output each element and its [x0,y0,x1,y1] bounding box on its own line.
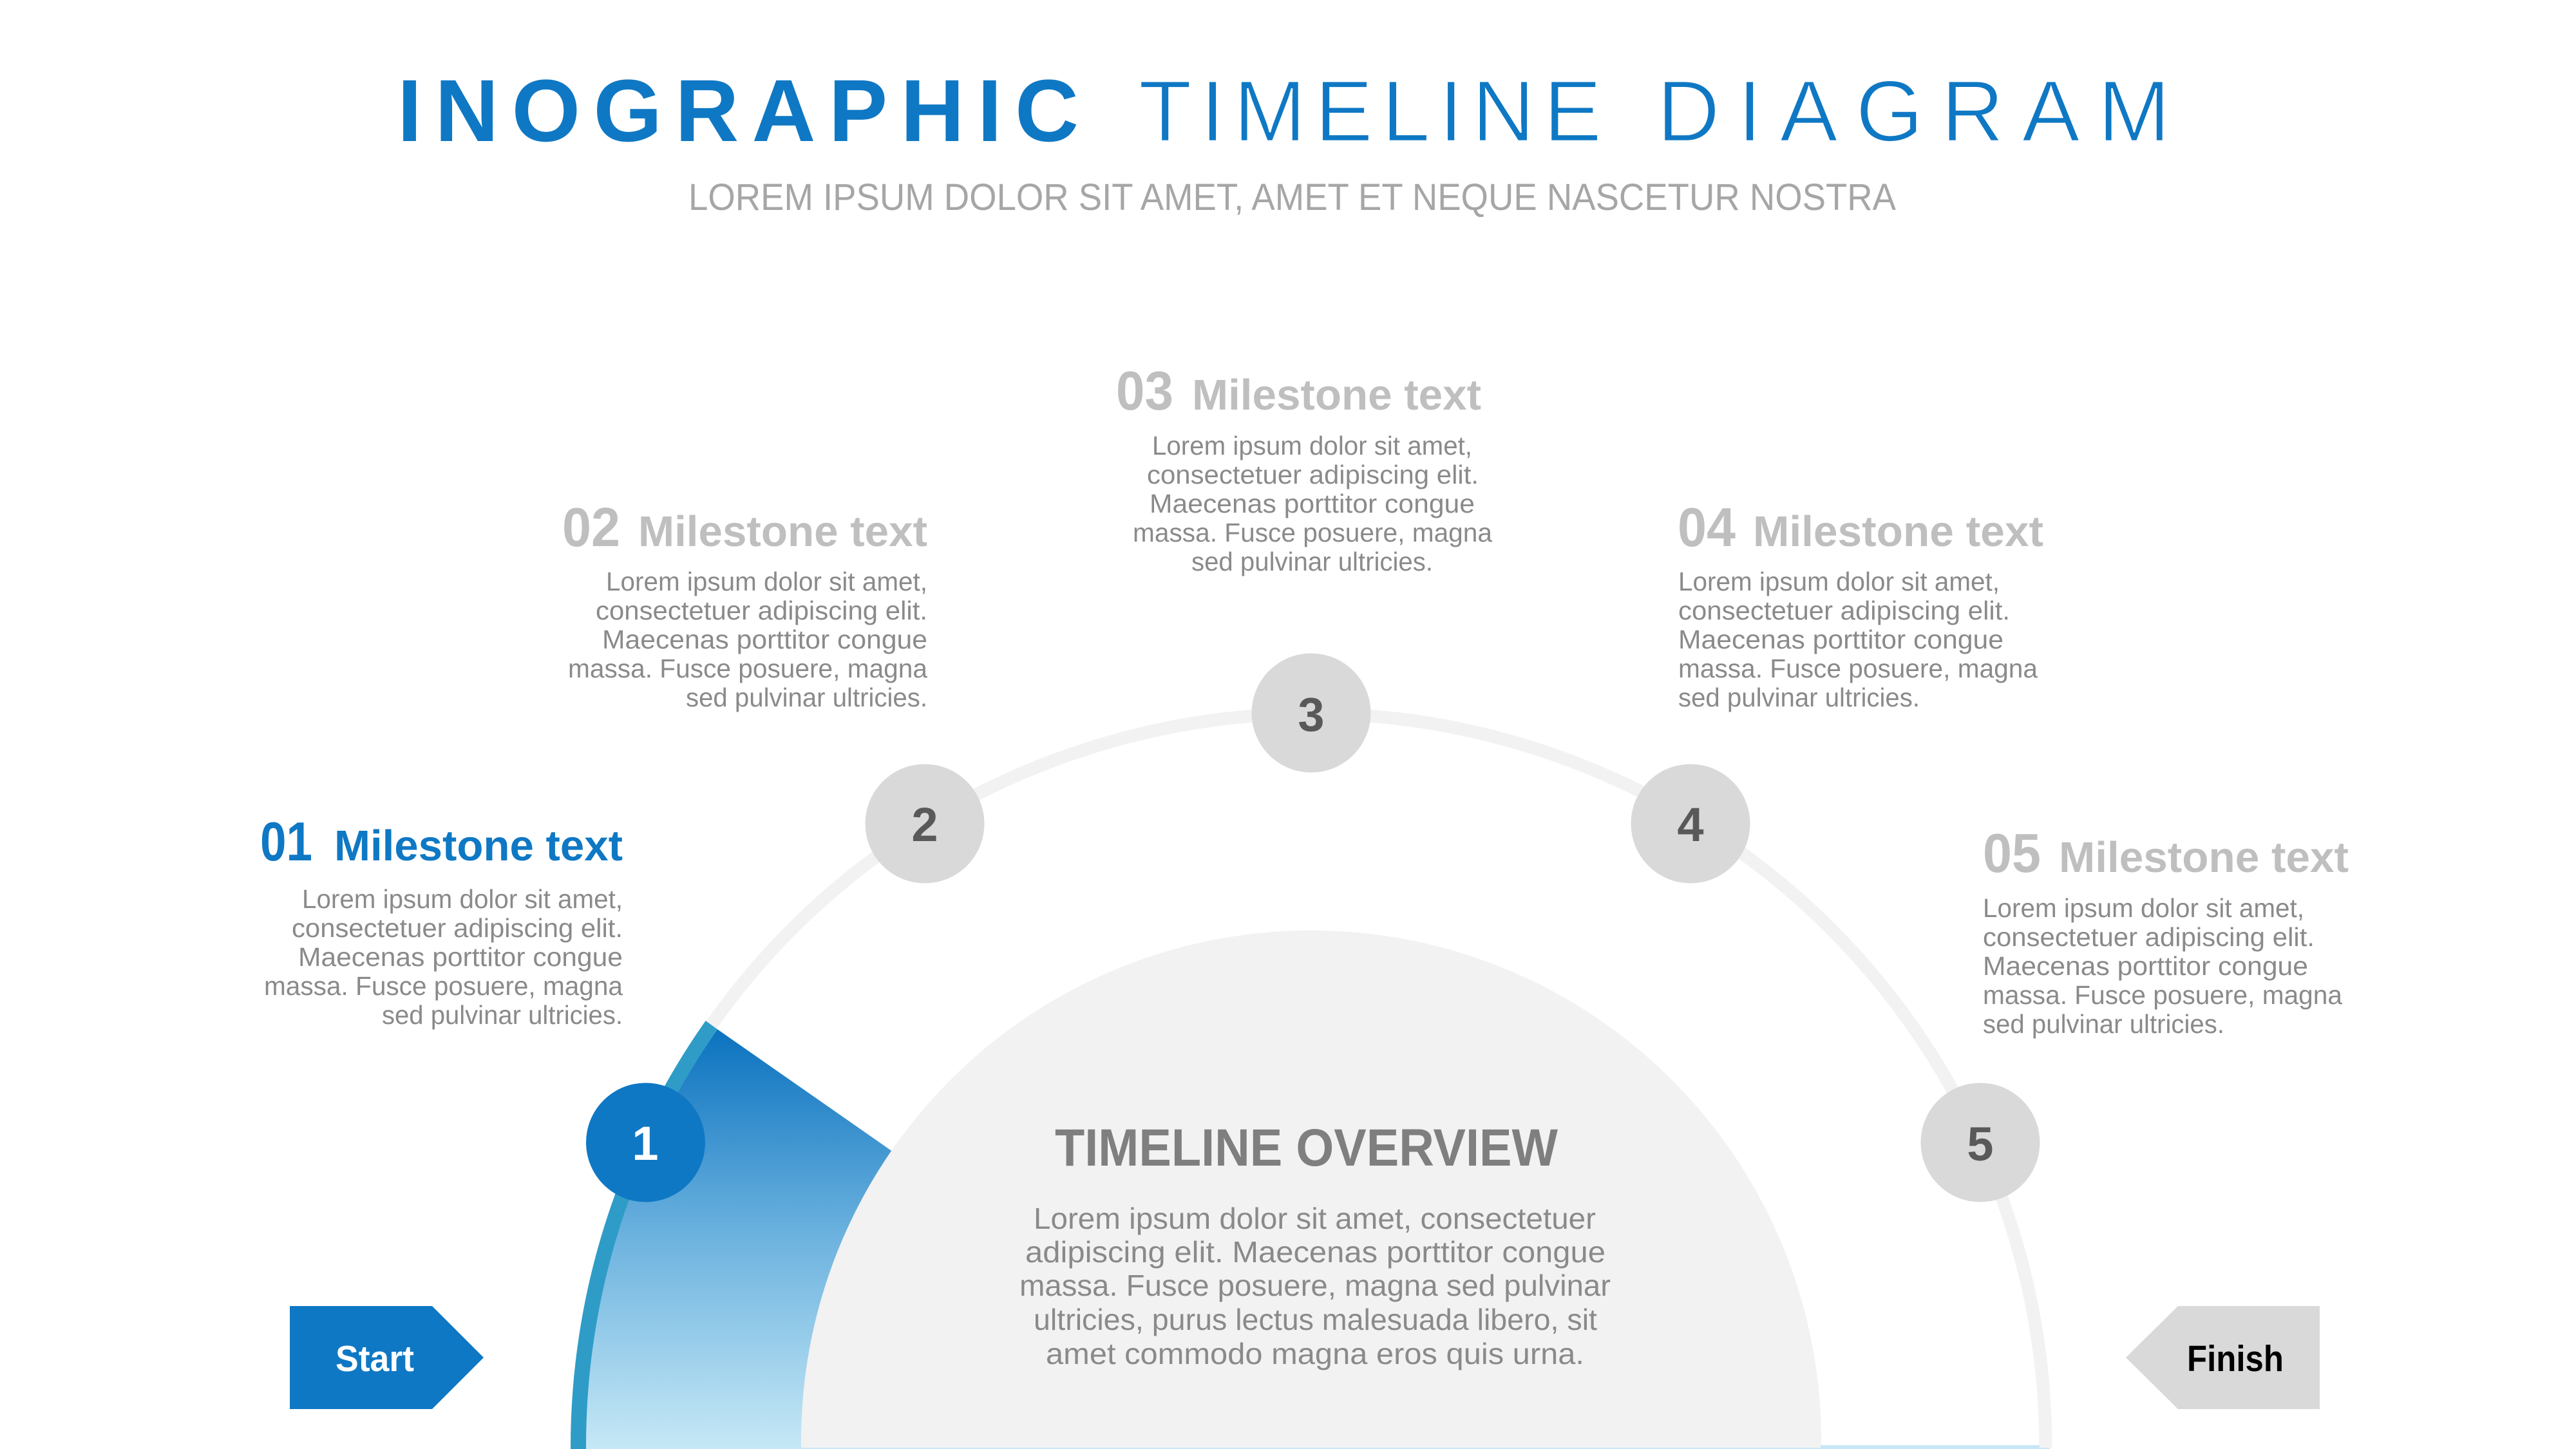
overview text block: Lorem ipsum dolor sit amet, consectetuer [1034,1202,1596,1235]
finish arrow: Finish [2187,1338,2284,1379]
milestone 04: Lorem ipsum dolor sit amet, [1678,567,2000,596]
milestone 05: 05 [1983,823,2041,884]
milestone 01: massa. Fusce posuere, magna [264,971,623,1001]
milestone 03: Lorem ipsum dolor sit amet, [1152,431,1472,460]
milestone 04: sed pulvinar ultricies. [1678,683,1920,712]
title [397,62,2170,160]
title: TIMELINE [1139,62,1602,160]
marker 1: 1 [632,1117,659,1170]
finish arrow [2126,1306,2320,1409]
overview text block: amet commodo magna eros quis urna. [1046,1337,1584,1370]
milestone 05: sed pulvinar ultricies. [1983,1009,2224,1039]
milestone 01: Milestone text [334,822,623,870]
milestone 03 [1116,361,1492,576]
milestone 05: Milestone text [2059,833,2349,882]
milestone 04: 04 [1678,497,1736,558]
milestone 02: consectetuer adipiscing elit. [596,596,927,625]
overview text block [1019,1119,1611,1370]
marker 2: 2 [911,798,938,851]
milestone 01: consectetuer adipiscing elit. [292,913,623,943]
milestone 02: Milestone text [638,507,927,556]
milestone 03: Maecenas porttitor congue [1150,489,1475,518]
timeline arc [712,714,2045,1448]
milestone 04: Milestone text [1753,507,2043,556]
milestone 01: 01 [260,811,312,873]
subtitle: LOREM IPSUM DOLOR SIT AMET, AMET ET NEQUE NASCETUR NOSTRA [688,176,1896,218]
marker 3: 3 [1298,688,1325,741]
marker 4: 4 [1677,798,1704,851]
milestone 03: massa. Fusce posuere, magna [1133,518,1492,547]
title: INOGRAPHIC [397,62,1079,160]
overview semicircle [801,931,1821,1448]
milestone 02: 02 [562,497,620,558]
milestone 05: Lorem ipsum dolor sit amet, [1983,893,2304,923]
milestone 04: Maecenas porttitor congue [1678,625,2003,654]
marker 3 [1252,653,1370,773]
milestone 04: consectetuer adipiscing elit. [1678,596,2010,625]
active segment gradient wedge [585,1029,966,1449]
milestone 05 [1983,823,2349,1039]
marker 5 [1920,1083,2040,1202]
milestone 01: Lorem ipsum dolor sit amet, [302,884,623,914]
milestone 05: massa. Fusce posuere, magna [1983,980,2342,1010]
title: DIAGRAM [1657,62,2170,160]
overview text block: adipiscing elit. Maecenas porttitor congue [1025,1235,1605,1269]
overview text block: TIMELINE OVERVIEW [1055,1119,1558,1177]
milestone 02: Lorem ipsum dolor sit amet, [606,567,927,596]
milestone 03: consectetuer adipiscing elit. [1147,460,1479,489]
marker 2 [866,764,984,884]
marker 1 [586,1083,705,1202]
milestone 04: massa. Fusce posuere, magna [1678,654,2038,683]
overview text block: ultricies, purus lectus malesuada libero, sit [1034,1303,1597,1336]
milestone 01: Maecenas porttitor congue [298,942,623,972]
milestone 01: sed pulvinar ultricies. [382,1000,623,1030]
milestone 02: Maecenas porttitor congue [602,625,927,654]
milestone 03: sed pulvinar ultricies. [1191,547,1433,576]
milestone 01 [260,811,623,1030]
marker 4 [1631,764,1750,884]
marker 5: 5 [1967,1117,1994,1171]
milestone 05: Maecenas porttitor congue [1983,951,2308,981]
milestone 03: 03 [1116,361,1173,422]
milestone 03: Milestone text [1192,371,1481,419]
active segment arc [571,1021,717,1449]
milestone 02: massa. Fusce posuere, magna [568,654,927,683]
milestone 02: sed pulvinar ultricies. [686,683,927,712]
bottom base strip [801,1445,2050,1449]
overview text block: massa. Fusce posuere, magna sed pulvinar [1019,1269,1611,1302]
start arrow [290,1306,484,1409]
milestone 02 [562,497,927,712]
milestone 04 [1678,497,2043,712]
milestone 05: consectetuer adipiscing elit. [1983,922,2315,952]
start arrow: Start [336,1338,414,1379]
